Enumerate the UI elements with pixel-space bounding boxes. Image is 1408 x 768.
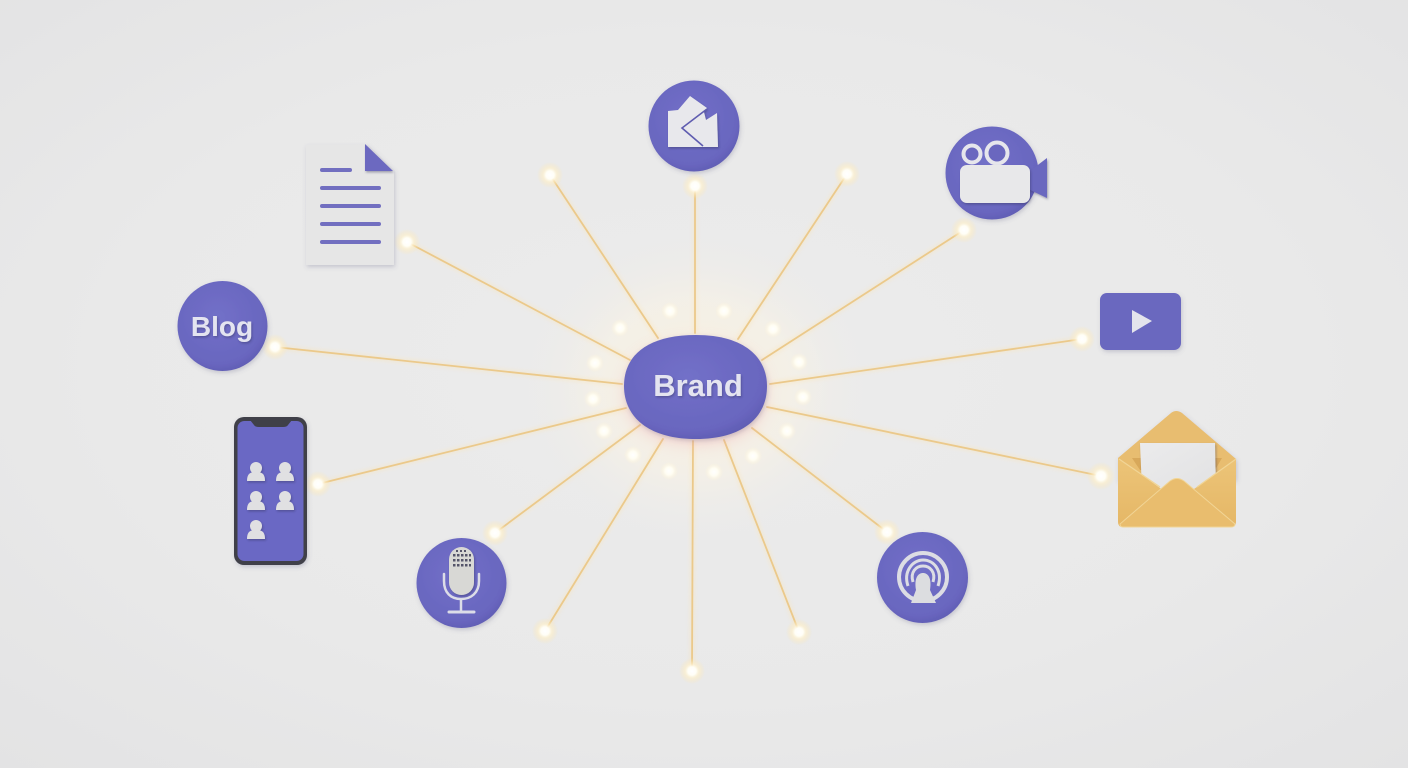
- document text lines: [320, 168, 381, 244]
- icon: microphone: [416, 538, 506, 628]
- icon: podcast broadcast: [877, 532, 968, 623]
- central warm glow: [526, 236, 866, 536]
- icon: document: [306, 144, 394, 265]
- icon: phone with community: [234, 417, 307, 565]
- microphone grille: [453, 550, 471, 566]
- icon: Blog: [178, 281, 268, 371]
- icon: open envelope: [1118, 411, 1236, 527]
- connector lines: [275, 174, 1101, 671]
- glowing line end nodes: [262, 161, 1115, 684]
- letter sheet: [1140, 443, 1216, 490]
- icon: Blog: Blog: [191, 311, 253, 342]
- small dots around hub: [584, 302, 812, 481]
- hub label: Brand: [653, 368, 743, 403]
- central hub: Brand: [624, 335, 767, 445]
- icon: video play button: [1100, 293, 1181, 350]
- community avatars: [247, 462, 294, 539]
- document corner fold: [365, 144, 393, 171]
- icon: video camera: [946, 126, 1047, 220]
- icon: image gallery: [648, 80, 740, 172]
